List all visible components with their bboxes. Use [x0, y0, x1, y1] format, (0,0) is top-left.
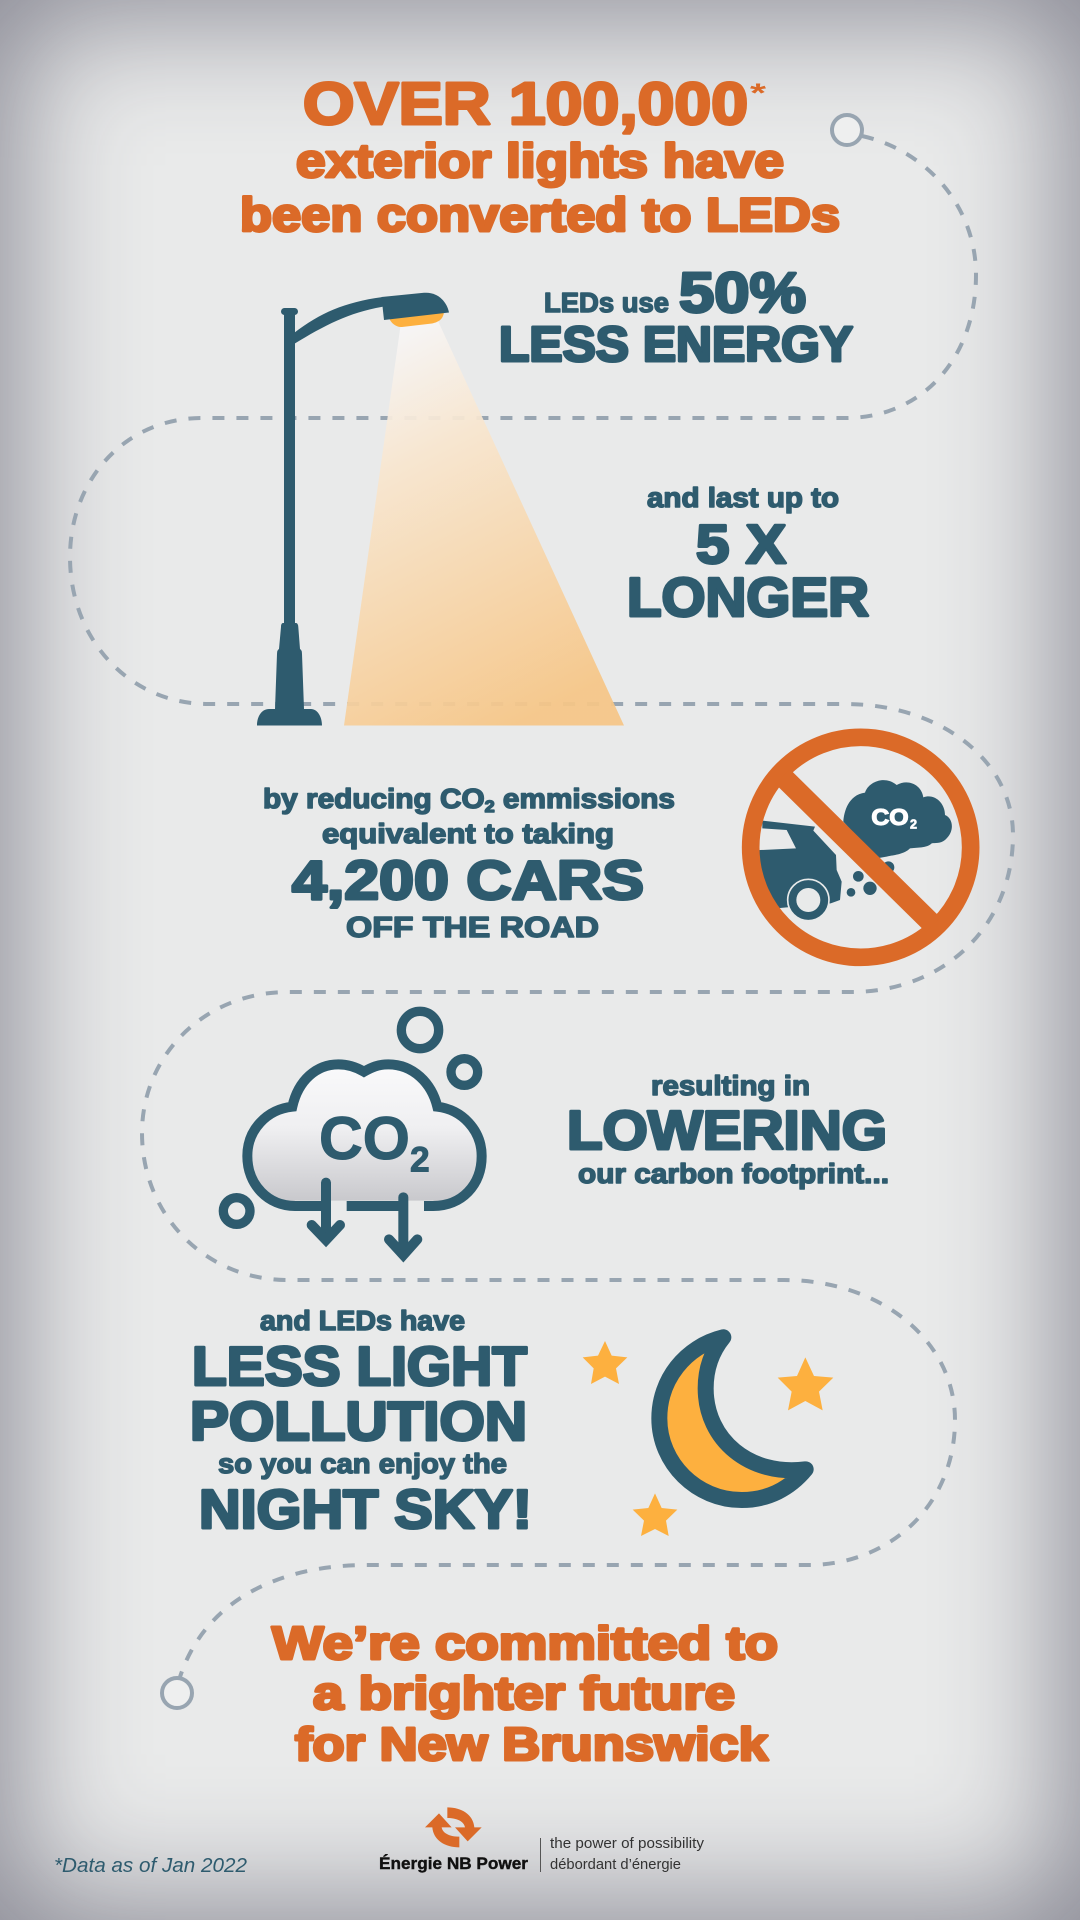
light beam — [344, 321, 624, 726]
text: less light pollution: NIGHT SKY! — [199, 1478, 532, 1540]
moon — [659, 1337, 806, 1500]
lamp pole — [257, 308, 322, 726]
car — [760, 820, 842, 908]
title — [240, 71, 840, 241]
start ring — [832, 115, 862, 145]
bubbles — [223, 1011, 478, 1224]
exhaust dots — [847, 861, 894, 897]
text: less light pollution: and LEDs have — [260, 1305, 465, 1336]
text: cars off the road: emmissions — [495, 783, 675, 814]
icon: street lamp with light beam — [257, 293, 624, 726]
text: less light pollution: POLLUTION — [190, 1390, 527, 1452]
cloud outline — [247, 1064, 482, 1206]
text: less energy: LEDs use — [544, 287, 669, 318]
footnote: *Data as of Jan 2022 — [54, 1855, 247, 1877]
co2 label: CO — [871, 804, 909, 830]
logo: Énergie NB Power: débordant d’énergie — [550, 1857, 681, 1873]
co2 label: 2 — [410, 1141, 430, 1180]
text: lowering carbon footprint: our carbon footprint... — [578, 1158, 889, 1189]
icon: no car emissions sign — [747, 737, 971, 957]
text: lowering carbon footprint: resulting in — [651, 1070, 810, 1101]
exhaust cloud — [843, 780, 952, 858]
text: less energy: LESS ENERGY — [499, 318, 853, 372]
down arrows — [312, 1183, 417, 1255]
text: less energy: 50% — [679, 261, 806, 325]
title: exterior lights have — [296, 134, 784, 187]
car wheel — [788, 879, 829, 921]
text: cars off the road: OFF THE ROAD — [346, 912, 599, 944]
text: less energy — [499, 261, 853, 372]
text: less light pollution — [190, 1305, 532, 1540]
logo: Énergie NB Power — [379, 1807, 705, 1873]
dashed route line — [70, 115, 1013, 1708]
text: cars off the road: equivalent to taking — [322, 818, 614, 849]
prohibition ring and bar — [751, 737, 971, 957]
text: cars off the road: by reducing CO — [263, 783, 471, 814]
closing statement: We’re committed to — [272, 1617, 778, 1669]
text: less light pollution: LESS LIGHT — [192, 1335, 527, 1397]
text: five times longer — [627, 482, 869, 628]
text: cars off the road — [263, 783, 675, 944]
text: five times longer: LONGER — [627, 566, 869, 628]
stars — [583, 1341, 833, 1536]
co2 label: 2 — [910, 817, 917, 831]
text: less light pollution: so you can enjoy the — [218, 1448, 507, 1479]
text: five times longer: 5 X — [696, 513, 786, 575]
closing statement: for New Brunswick — [295, 1718, 768, 1770]
logo icon — [425, 1807, 482, 1847]
lamp arm — [294, 297, 384, 344]
title: * — [750, 78, 767, 108]
text: lowering carbon footprint: LOWERING — [567, 1099, 887, 1161]
logo: Énergie NB Power: Énergie NB Power — [379, 1854, 528, 1873]
text: five times longer: and last up to — [647, 482, 839, 513]
co2 label: CO — [319, 1104, 410, 1172]
cloud fill — [247, 1064, 482, 1206]
closing statement: a brighter future — [313, 1667, 735, 1719]
closing statement — [272, 1617, 778, 1770]
text: cars off the road: 4,200 CARS — [292, 849, 644, 911]
icon: moon and stars — [583, 1337, 833, 1536]
text: cars off the road: 2 — [485, 797, 495, 816]
title: OVER 100,000 — [303, 71, 748, 137]
text: lowering carbon footprint — [567, 1070, 889, 1189]
logo: Énergie NB Power: the power of possibility — [550, 1836, 705, 1852]
icon: co2 cloud with down arrows — [223, 1011, 482, 1255]
lamp bulb — [389, 312, 444, 327]
lamp head — [382, 293, 449, 320]
end ring — [162, 1678, 192, 1708]
title: been converted to LEDs — [240, 188, 840, 241]
